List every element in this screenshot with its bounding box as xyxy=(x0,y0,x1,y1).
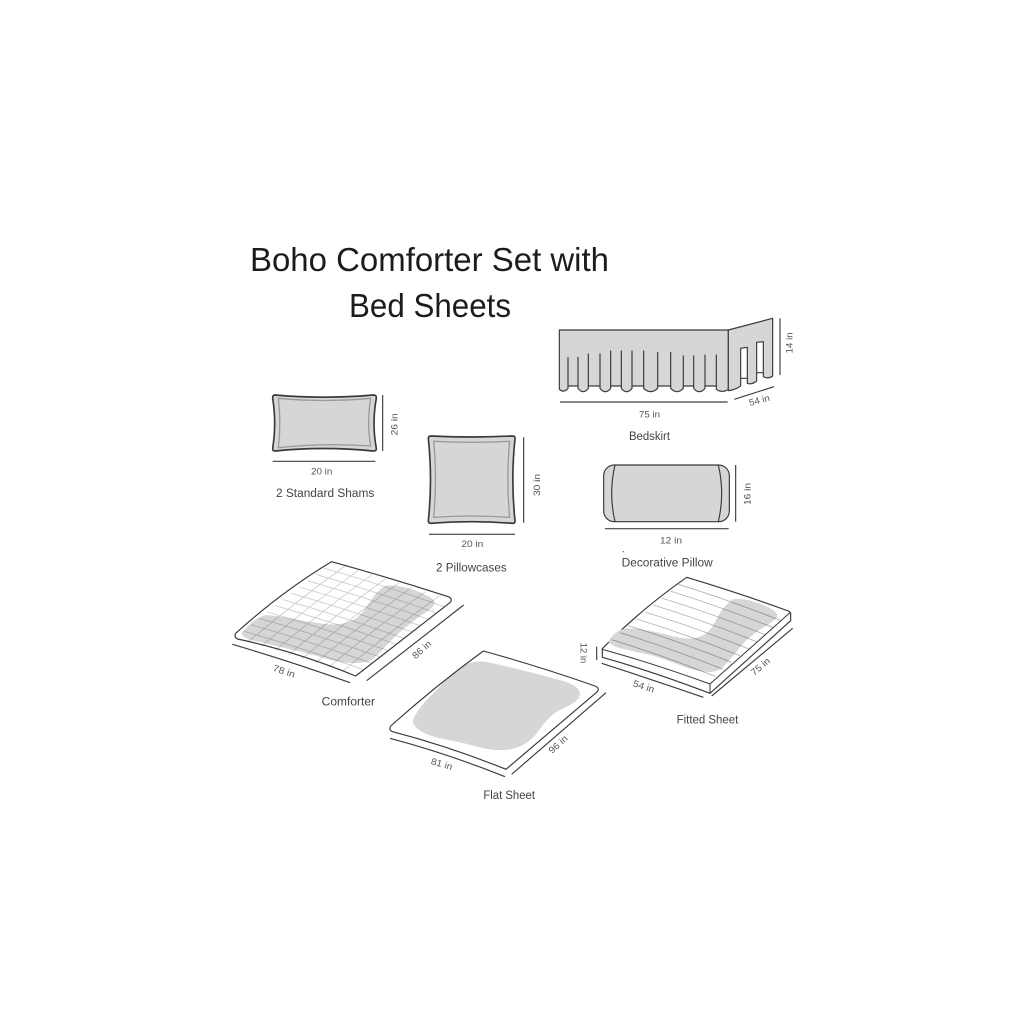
sham width dimension xyxy=(273,460,375,463)
panel: flat sheet xyxy=(390,651,606,802)
label: Bedskirt: Bedskirt xyxy=(629,429,671,443)
panel: standard shams xyxy=(273,395,399,500)
fitted sheet top edge xyxy=(602,613,790,684)
label: 14 in: 14 in xyxy=(784,332,794,353)
pillowcase inner seam xyxy=(434,441,510,517)
comforter length dimension xyxy=(367,605,464,681)
label: Flat Sheet: Flat Sheet xyxy=(483,788,536,802)
pillow end seams xyxy=(612,465,722,522)
panel: decorative pillow xyxy=(604,465,752,570)
fitted sheet mattress outline xyxy=(602,577,791,693)
bedskirt side slot bottoms xyxy=(741,373,763,378)
label: 16 in: 16 in xyxy=(742,483,752,505)
panel: shams and pillowcases xyxy=(273,395,542,575)
fitted sheet length dimension xyxy=(712,628,793,696)
fitted sheet height dimension xyxy=(595,647,598,660)
bedskirt front panel xyxy=(559,330,728,392)
label: 75 in: 75 in xyxy=(639,409,660,419)
comforter gray area xyxy=(242,585,434,663)
label: Comforter: Comforter xyxy=(322,695,375,709)
label: Fitted Sheet: Fitted Sheet xyxy=(677,712,739,726)
panel: comforter xyxy=(232,562,464,709)
panel: fitted sheet xyxy=(579,577,793,726)
comforter grid xyxy=(243,566,444,672)
label: 2 Pillowcases: 2 Pillowcases xyxy=(436,561,507,575)
title: Bed Sheets xyxy=(349,287,511,324)
title xyxy=(250,241,609,324)
fitted sheet width dimension xyxy=(602,663,703,697)
label: 54 in: 54 in xyxy=(748,393,771,408)
label: 12 in: 12 in xyxy=(579,643,589,663)
label: 75 in: 75 in xyxy=(749,656,772,678)
comforter width dimension xyxy=(232,644,350,683)
label: 12 in: 12 in xyxy=(660,535,682,545)
panel: bedskirt xyxy=(559,318,794,443)
label: 26 in: 26 in xyxy=(389,413,399,435)
panel: decorative pillow and fitted sheet xyxy=(579,465,793,726)
label: 96 in: 96 in xyxy=(547,733,570,755)
pillow width dimension xyxy=(605,527,729,530)
bedskirt height dimension xyxy=(778,318,782,375)
comforter outline xyxy=(235,562,451,676)
fitted sheet stripes xyxy=(612,584,782,676)
label: 81 in: 81 in xyxy=(430,756,454,772)
bedskirt pleat lines xyxy=(568,351,716,386)
label: 30 in: 30 in xyxy=(532,474,542,496)
flat sheet gray area xyxy=(413,661,580,750)
sham inner seam xyxy=(278,398,371,448)
label: 86 in: 86 in xyxy=(410,639,433,661)
flat sheet width dimension xyxy=(390,738,505,777)
label: Decorative Pillow: Decorative Pillow xyxy=(622,556,713,570)
pillow body xyxy=(604,465,729,522)
pillowcase outer shape xyxy=(428,436,515,523)
pillowcase height dimension xyxy=(522,437,525,523)
panel: pillowcases xyxy=(428,436,542,575)
pillowcase width dimension xyxy=(429,533,515,536)
flat sheet length dimension xyxy=(512,693,606,774)
title: Boho Comforter Set with xyxy=(250,241,609,278)
label: 78 in: 78 in xyxy=(272,663,296,680)
fitted sheet gray area xyxy=(608,599,777,672)
stray mark xyxy=(623,551,624,552)
pillow height dimension xyxy=(734,465,737,522)
label: 20 in: 20 in xyxy=(311,466,332,476)
label: 2 Standard Shams: 2 Standard Shams xyxy=(276,486,374,500)
sham height dimension xyxy=(381,395,384,451)
label: 20 in: 20 in xyxy=(461,539,483,549)
bedskirt width dimension xyxy=(560,400,728,404)
label: 54 in: 54 in xyxy=(632,678,656,695)
flat sheet outline xyxy=(390,651,598,769)
bedskirt side panel xyxy=(728,318,773,391)
sham outer shape xyxy=(273,395,376,451)
bedskirt depth dimension xyxy=(734,387,774,399)
fitted sheet front edge xyxy=(708,684,711,693)
